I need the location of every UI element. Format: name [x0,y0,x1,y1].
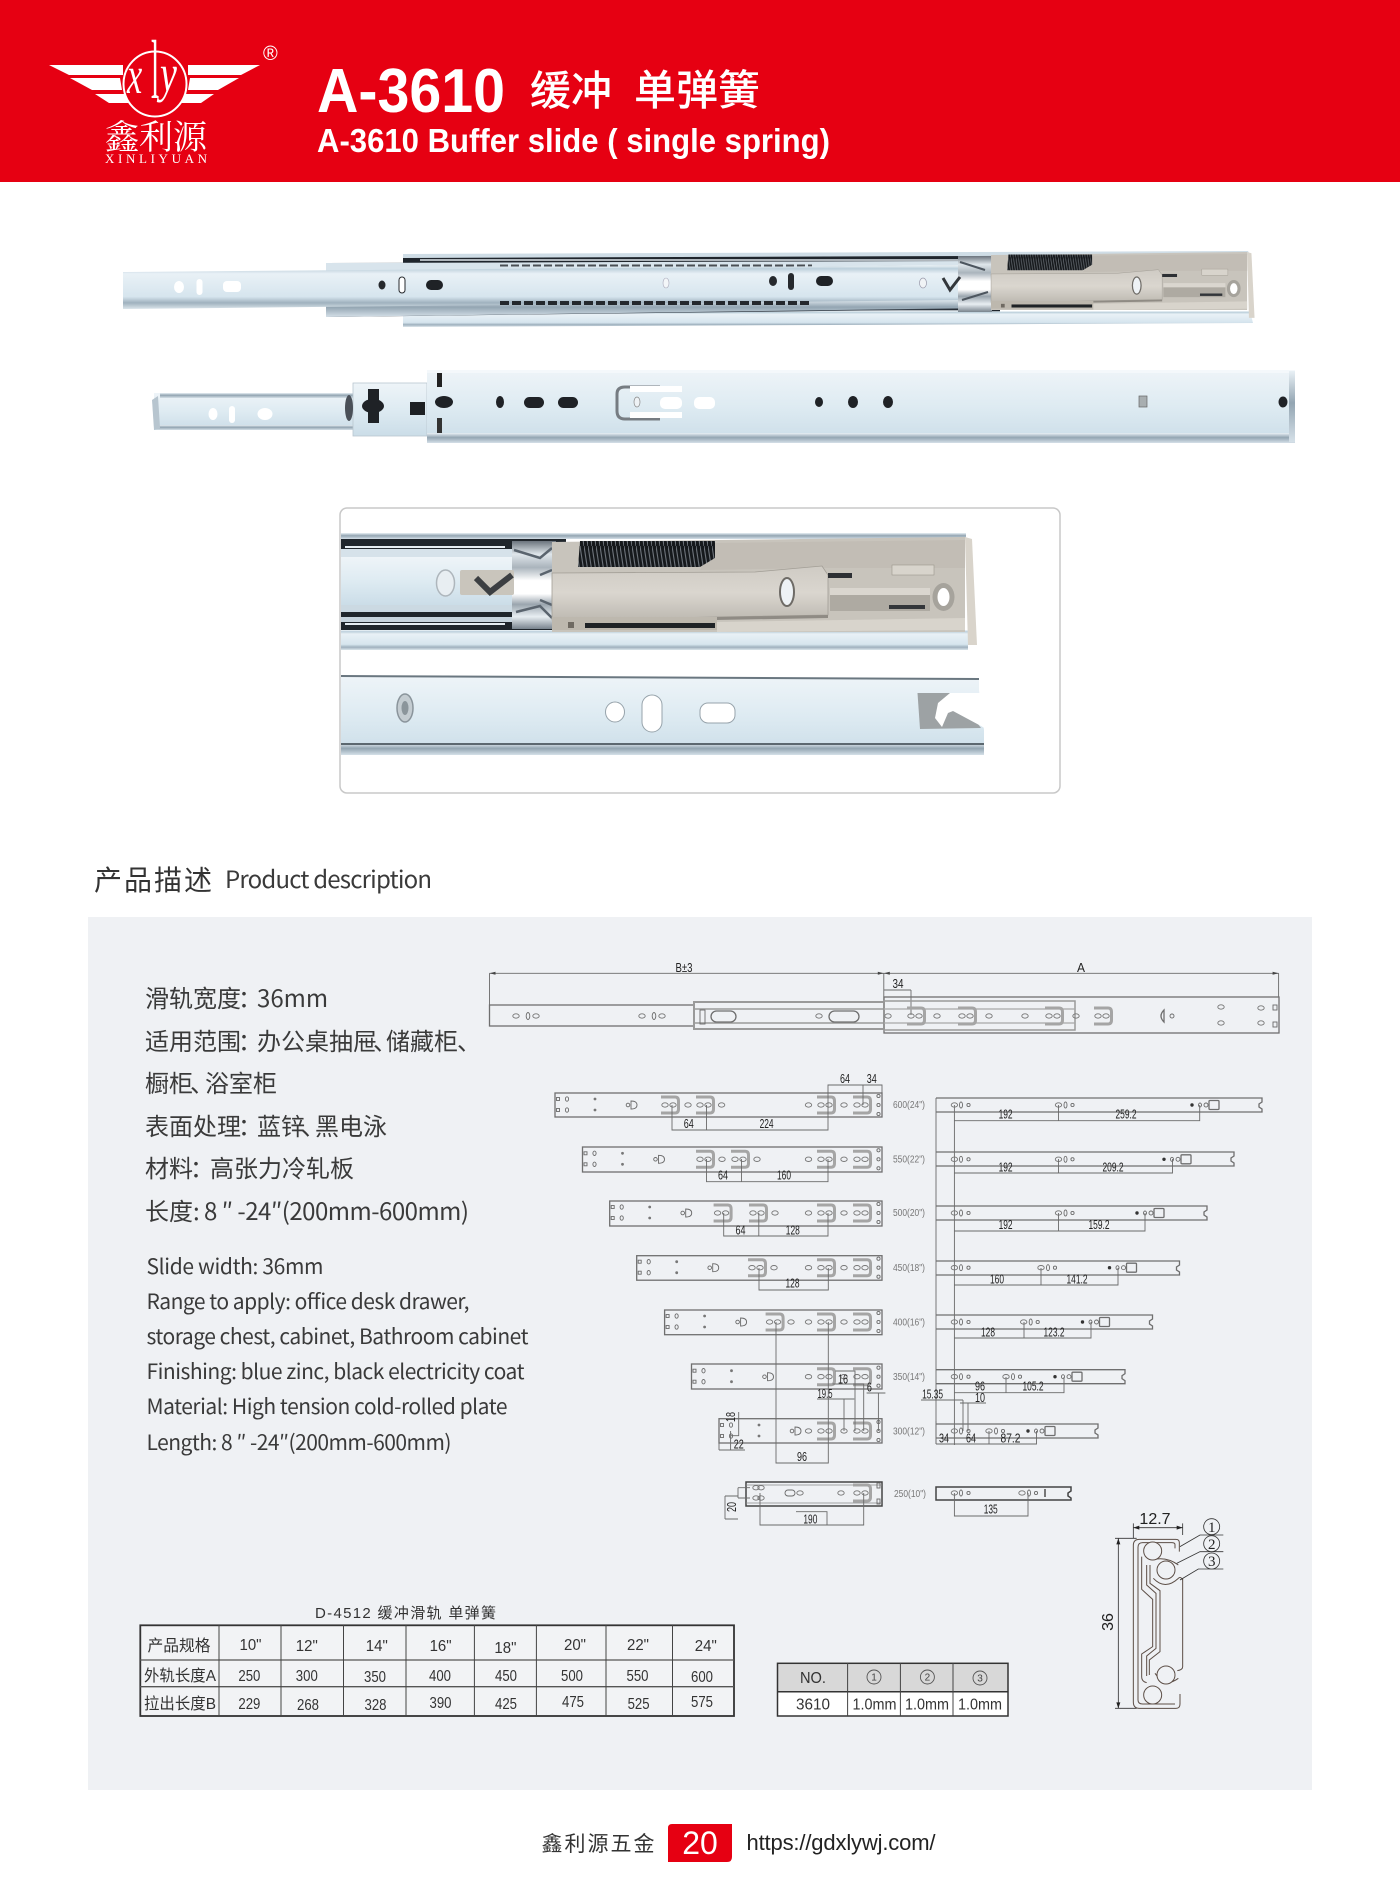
technical drawing: outer rail hole layouts: 64 [736,1222,746,1238]
material thickness table [778,1663,1008,1716]
size table: 475 [562,1694,584,1711]
chinese specification text: 办公桌抽屉 [257,1022,377,1057]
logo: ® [263,43,278,65]
logo: x [126,45,142,105]
size table title: D-4512 缓冲滑轨 单弹簧 [315,1605,496,1622]
english specification text: Range to apply: office desk drawer, [146,1286,470,1316]
size table: 425 [495,1696,517,1713]
footer: 20 [682,1825,718,1861]
technical drawing: outer rail hole layouts [555,1071,926,1526]
english specification text: Finishing: blue zinc, black electricity coat [146,1356,525,1386]
technical drawing: outer rail hole layouts: 550(22") [893,1154,925,1166]
logo: 鑫利源 [105,119,208,157]
size table: 20" [564,1637,586,1654]
chinese specification text: 36mm [257,979,328,1014]
chinese specification text: 表面处理 [145,1107,241,1142]
material thickness table: 3610 [796,1696,830,1714]
technical drawing: outer rail hole layouts: 450(18") [893,1263,925,1274]
detail: inner rail [341,676,986,755]
technical drawing: inner rail hole layouts: 192 [999,1160,1013,1174]
chinese specification text: 长度 [145,1192,193,1227]
technical drawing: outer rail hole layouts: 160 [777,1168,791,1182]
cross-section drawing [1100,1511,1223,1708]
english specification text: Length: 8 ″ -24″(200mm-600mm) [146,1427,452,1457]
technical drawing: full slide: 34 [892,976,904,991]
english specification text [146,1251,529,1457]
chinese specification text: 、 [373,1022,397,1057]
section heading: 产品描述 [94,865,214,896]
title: chinese name second part: 单弹簧 [634,67,760,114]
chinese specification text [145,979,481,1227]
chinese specification text: 、 [457,1022,481,1057]
technical drawing: inner rail hole layouts: 192 [999,1106,1013,1122]
size table: 300 [296,1668,318,1685]
technical drawing: inner rail hole layouts: 34 [939,1430,949,1446]
chinese specification text: 橱柜 [145,1064,193,1099]
size table: 10" [240,1637,262,1654]
technical drawing: outer rail hole layouts: 19.5 [818,1386,832,1401]
chinese specification text: 储藏柜 [386,1022,458,1057]
material thickness table: 1 [871,1672,877,1684]
technical drawing: full slide [490,960,1279,1033]
technical drawing: inner rail hole layouts: 10 [975,1390,985,1405]
technical drawing: outer rail hole layouts: 190 [803,1512,817,1526]
technical drawing: inner rail hole layouts: 128 [981,1324,995,1340]
size table: 18" [494,1640,516,1657]
technical drawing: inner rail hole layouts: 141.2 [1066,1272,1088,1286]
logo: y [157,44,177,103]
cross-section drawing: 12.7 [1139,1511,1171,1528]
english specification text: Slide width: 36mm [146,1251,324,1281]
english specification text: storage chest, cabinet, Bathroom cabinet [146,1321,529,1351]
technical drawing: outer rail hole layouts: 400(16") [893,1318,925,1328]
size table: 229 [238,1696,260,1713]
size table: 500 [561,1668,583,1685]
logo: l [151,23,159,117]
chinese specification text: ： [238,979,262,1014]
material thickness table: 2 [925,1672,931,1684]
size table: 外轨长度A [144,1667,216,1685]
size table: 328 [364,1697,387,1714]
size table: 390 [430,1695,452,1712]
technical drawing: outer rail hole layouts: 16 [838,1372,848,1386]
technical drawing: outer rail hole layouts: 18 [723,1412,738,1422]
technical drawing: inner rail hole layouts: 64 [966,1430,976,1446]
size table: 14" [366,1638,388,1655]
technical drawing: outer rail hole layouts: 350(14") [893,1372,925,1383]
cross-section drawing: 2 [1208,1537,1215,1553]
size table: 22" [627,1637,649,1654]
chinese specification text: ： [190,1149,214,1184]
logo: XINLIYUAN [105,151,208,166]
english specification text: Material: High tension cold-rolled plate [146,1391,508,1421]
technical drawing: inner rail hole layouts: 135 [984,1502,998,1516]
technical drawing: inner rail hole layouts [921,1098,1262,1516]
size table: 24" [695,1638,717,1655]
technical drawing: inner rail hole layouts: 209.2 [1102,1160,1124,1174]
cross-section drawing: 1 [1208,1520,1215,1536]
detail: closed slide with damper [341,533,977,650]
chinese specification text: 蓝锌 [257,1107,305,1142]
technical drawing: inner rail hole layouts: 160 [990,1272,1004,1286]
cross-section drawing: 3 [1208,1554,1215,1570]
technical drawing: outer rail hole layouts: 6 [867,1380,872,1394]
material thickness table: 1.0mm [905,1696,949,1714]
size table: 575 [691,1694,713,1711]
chinese specification text: 浴室柜 [205,1064,277,1099]
technical drawing: outer rail hole layouts: 22 [734,1436,744,1452]
technical drawing: outer rail hole layouts: 64 [718,1168,728,1182]
size table: 550 [626,1668,649,1685]
chinese specification text: ： [238,1022,262,1057]
technical drawing: outer rail hole layouts: 20 [724,1502,739,1512]
technical drawing: inner rail hole layouts: 259.2 [1116,1106,1136,1122]
footer [542,1824,936,1862]
technical drawing: outer rail hole layouts: 64 [684,1116,694,1131]
technical drawing: inner rail hole layouts: 123.2 [1044,1324,1064,1340]
size table: 12" [296,1638,318,1655]
size table: 拉出长度B [144,1695,216,1713]
size table: 400 [429,1668,451,1685]
material thickness table: 3 [977,1674,983,1684]
technical drawing: outer rail hole layouts: 64 [840,1071,850,1086]
technical drawing: inner rail hole layouts: 105.2 [1022,1378,1044,1394]
technical drawing: outer rail hole layouts: 250(10") [894,1489,926,1500]
material thickness table: 1.0mm [852,1696,896,1714]
size table: 16" [430,1638,452,1655]
footer: https://gdxlywj.com/ [746,1830,936,1855]
technical drawing: full slide: A [1077,960,1085,975]
technical drawing: full slide: B±3 [676,960,692,975]
size table: 268 [297,1697,319,1714]
technical drawing: outer rail hole layouts: 300(12") [893,1426,925,1438]
chinese specification text: 材料 [145,1149,193,1184]
technical drawing: outer rail hole layouts: 128 [786,1276,800,1290]
chinese specification text: 高张力冷轧板 [210,1149,354,1184]
chinese specification text: 、 [301,1107,325,1142]
title: model: A-3610 [317,57,505,126]
technical drawing: outer rail hole layouts: 128 [786,1222,800,1238]
material thickness table: 1.0mm [958,1696,1002,1714]
chinese specification text: 滑轨宽度 [145,979,241,1014]
chinese specification text: 、 [190,1064,214,1099]
technical drawing: inner rail hole layouts: 87.2 [1000,1430,1020,1446]
technical drawing: inner rail hole layouts: 159.2 [1088,1217,1110,1232]
technical drawing: inner rail hole layouts: 96 [975,1378,985,1394]
size table [140,1625,734,1716]
size table: 350 [364,1669,386,1686]
section heading: Product description [225,860,432,895]
subtitle: A-3610 Buffer slide ( single spring) [317,122,830,159]
section heading [94,860,432,896]
grey specification panel [88,917,1312,1790]
technical drawing: outer rail hole layouts: 34 [867,1071,877,1086]
size table: 600 [691,1669,713,1686]
logo [49,23,278,166]
technical drawing: inner rail hole layouts: 192 [999,1217,1013,1232]
material thickness table: NO. [800,1670,826,1687]
product photo: slide extended, outer side [152,370,1295,443]
header band [0,0,1400,182]
chinese specification text: 8 ″ -24″(200mm-600mm) [204,1192,469,1227]
chinese specification text: ： [238,1107,262,1142]
size table: 450 [495,1668,517,1685]
technical drawing: outer rail hole layouts: 96 [797,1449,807,1464]
size table: 产品规格 [148,1637,210,1655]
chinese specification text: : [193,1192,200,1227]
technical drawing: inner rail hole layouts: 15.35 [922,1386,943,1402]
title: chinese name: 缓冲 [530,68,612,114]
technical drawing: outer rail hole layouts: 224 [760,1116,774,1131]
size table: 250 [238,1668,260,1685]
technical drawing: outer rail hole layouts: 600(24") [893,1100,925,1111]
chinese specification text: 适用范围 [145,1022,241,1057]
chinese specification text: 黑电泳 [315,1107,387,1142]
cross-section drawing: 36 [1100,1613,1117,1631]
footer: 鑫利源五金 [542,1833,656,1856]
technical drawing: outer rail hole layouts: 500(20") [893,1208,925,1219]
product photo: slide extended, inner side [123,251,1255,327]
detail photo panel [340,508,1060,793]
size table: 525 [628,1696,650,1713]
